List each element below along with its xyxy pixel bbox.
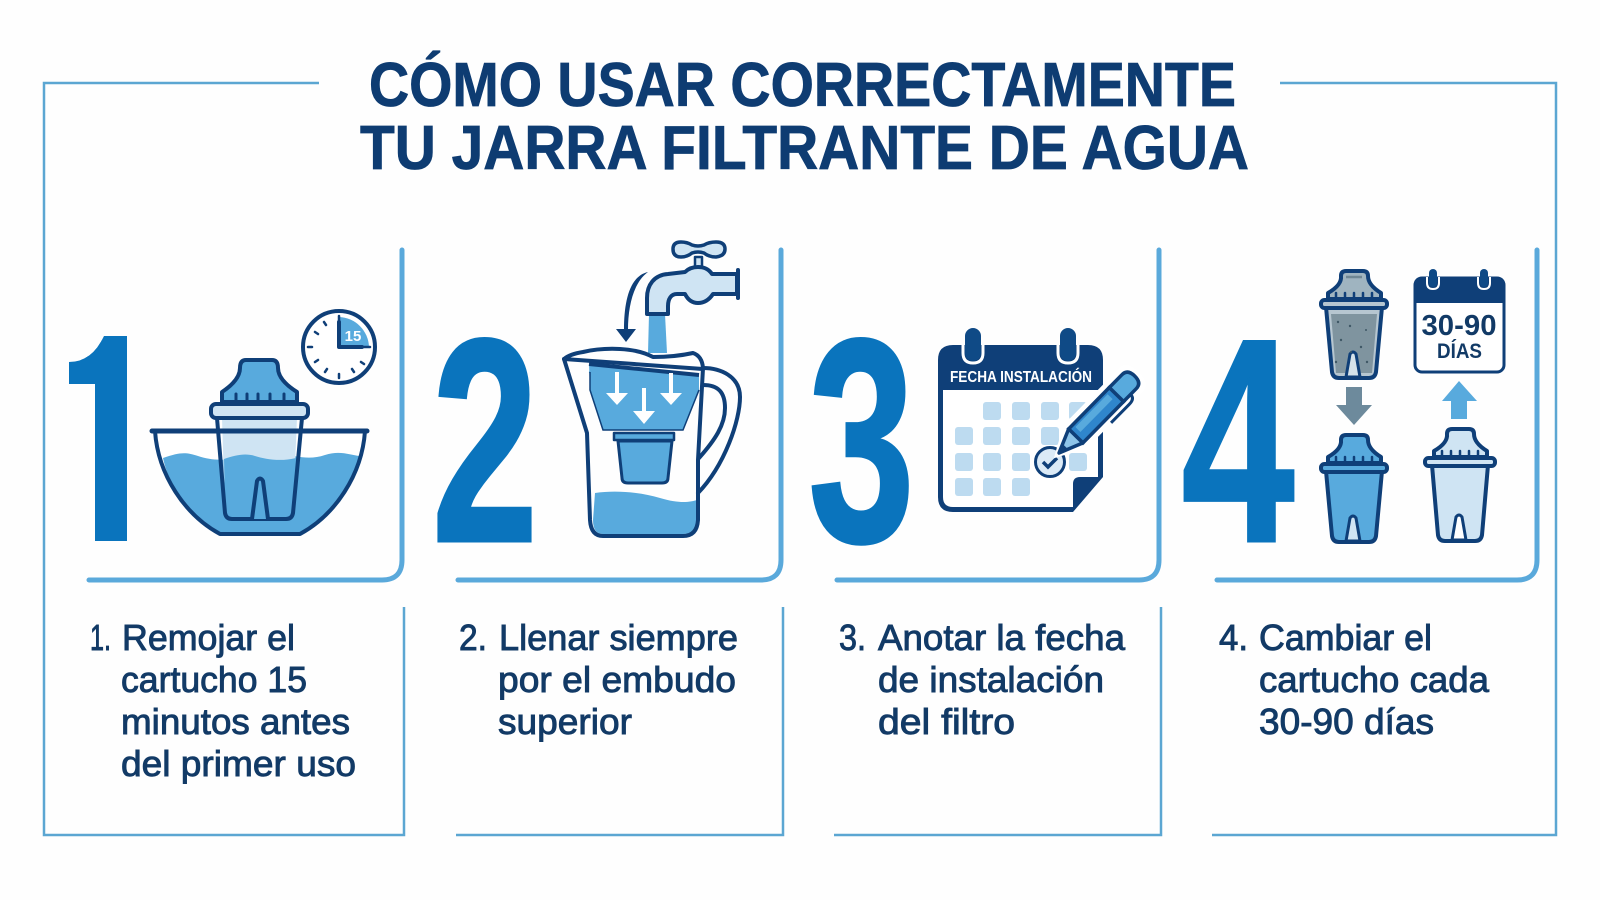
icon: used cartridge [1321,271,1387,378]
caption step 4: cartucho cada [1259,659,1490,700]
outer frame [44,83,1556,835]
arrow: up [1442,381,1477,419]
number 2: 2 [432,280,538,604]
panel: step 4 [1182,250,1537,742]
caption step 2: Llenar siempre [499,617,738,658]
caption step 2: 2. [459,617,487,658]
pen [1050,365,1148,464]
icon: calendar with pen [938,328,1148,512]
arrow: down [1336,387,1372,425]
caption step 3: del filtro [878,701,1015,742]
number 3: 3 [808,280,915,604]
caption step 1: cartucho 15 [121,659,307,700]
caption step 4: 4. [1219,617,1248,658]
icon: calendar 30-90 days: 30-90 [1422,310,1496,342]
check mark circle [1036,448,1064,476]
caption step 1 [90,617,356,784]
title: TU JARRA FILTRANTE DE AGUA [360,114,1249,183]
calendar day grid [955,402,1087,496]
icon: new cartridge, wet [1321,435,1387,542]
number 1: 1 [57,280,157,604]
icon: faucet [647,242,738,353]
icon: cartridge in bowl [152,360,367,534]
panel: step 1 [57,250,402,784]
caption step 3: 3. [839,617,866,658]
icon: calendar 30-90 days [1414,269,1505,372]
icon: clock 15 minutes [303,311,375,383]
icon: new cartridge, dry [1425,429,1495,541]
caption step 1: minutos antes [121,701,350,742]
title [360,51,1249,183]
caption step 4: Cambiar el [1259,617,1432,658]
calendar header label: FECHA INSTALACIÓN [950,368,1092,386]
caption step 3: Anotar la fecha [878,617,1126,658]
icon: calendar 30-90 days: DÍAS [1437,340,1482,363]
icon: clock 15 minutes: 15 [345,328,361,345]
title: CÓMO USAR CORRECTAMENTE [369,51,1236,120]
caption step 2: por el embudo [498,659,736,700]
caption step 2: superior [498,701,632,742]
caption step 3 [839,617,1126,742]
caption step 4: 30-90 días [1259,701,1434,742]
panel: step 2 [432,242,781,742]
panel: step 3 [808,250,1159,742]
caption step 2 [459,617,738,742]
icon: pitcher with funnel [564,349,740,536]
caption step 3: de instalación [878,659,1104,700]
number 4: 4 [1182,279,1294,604]
caption step 1: Remojar el [122,617,295,658]
arrow: fill direction [616,272,648,342]
caption step 1: 1. [90,617,111,658]
number 1 [69,336,127,541]
caption step 1: del primer uso [121,743,356,784]
caption step 4 [1219,617,1490,742]
